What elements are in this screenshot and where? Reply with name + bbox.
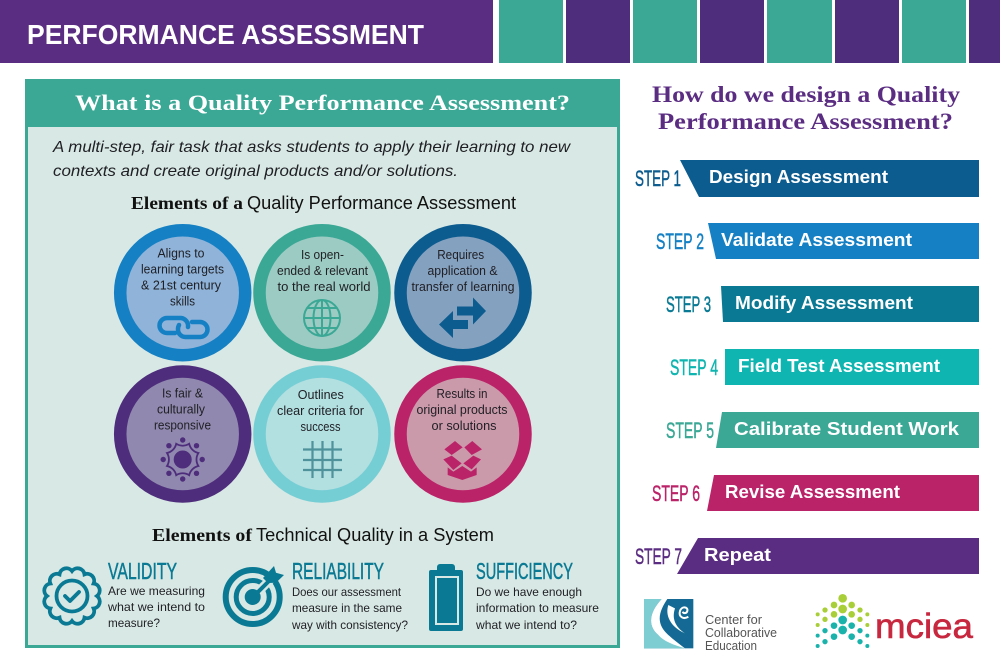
step 5	[666, 412, 979, 448]
logo: center for collaborative education: Education	[705, 638, 757, 653]
right column heading: How do we design a Quality	[652, 82, 960, 108]
circle: original products: Results in	[436, 386, 488, 401]
step 4: Field Test Assessment	[738, 355, 940, 376]
icon: community circle	[160, 437, 205, 482]
reliability text: way with consistency?	[291, 618, 408, 632]
validity text: what we intend to	[107, 600, 205, 614]
circle: application and transfer: Requires	[437, 247, 485, 262]
icon: globe	[304, 300, 340, 336]
sufficiency text: SUFFICIENCY	[476, 558, 573, 584]
circle: application and transfer: transfer of learning	[412, 279, 514, 294]
step 7: Repeat	[704, 544, 771, 565]
icon: open box	[443, 441, 482, 480]
reliability text	[291, 558, 408, 632]
circle: clear criteria: clear criteria for	[277, 403, 365, 418]
step 6	[652, 475, 979, 511]
right column heading: Performance Assessment?	[658, 109, 953, 135]
right column heading	[652, 82, 960, 135]
step 2: STEP 2	[656, 229, 704, 254]
technical quality heading: Elements of	[152, 525, 253, 545]
definition text: A multi-step, fair task that asks students to apply their learning to new	[52, 139, 572, 156]
circle: open-ended and relevant: Is open-	[301, 247, 344, 262]
sufficiency text	[475, 558, 599, 632]
title: PERFORMANCE ASSESSMENT	[27, 19, 424, 50]
circle: original products: or solutions	[432, 418, 497, 433]
circle: clear criteria: success	[300, 419, 341, 434]
step 1	[635, 160, 979, 197]
circle: aligns to learning targets: skills	[170, 293, 195, 308]
icon: validity badge	[44, 568, 100, 624]
step 3: STEP 3	[666, 292, 711, 317]
step 1: Design Assessment	[709, 166, 888, 187]
step 3: Modify Assessment	[735, 292, 913, 313]
icon: chain link	[160, 318, 208, 337]
step 4	[670, 349, 979, 385]
step 6: Revise Assessment	[725, 481, 900, 502]
circle: aligns to learning targets	[120, 230, 245, 355]
validity text: Are we measuring	[108, 584, 205, 598]
elements heading: Elements of a	[131, 193, 243, 213]
elements heading: Quality Performance Assessment	[247, 193, 516, 213]
circle: clear criteria	[260, 372, 384, 496]
circle: aligns to learning targets: learning targets	[141, 261, 224, 276]
definition text	[52, 139, 572, 180]
step 7	[635, 538, 979, 574]
circle: original products	[400, 372, 526, 496]
step 6: STEP 6	[652, 481, 700, 506]
logo: mciea: mciea	[875, 607, 974, 646]
reliability text: Does our assessment	[292, 585, 402, 599]
reliability text: RELIABILITY	[292, 558, 384, 584]
icon: sufficiency battery	[429, 564, 463, 631]
definition text: contexts and create original products and/or solutions.	[53, 163, 458, 180]
circle: original products: original products	[416, 402, 508, 417]
circle: open-ended and relevant: to the real world	[278, 279, 370, 294]
logo: center for collaborative education: Collaborative	[705, 625, 777, 640]
reliability text: measure in the same	[292, 601, 402, 615]
step 1: STEP 1	[635, 166, 681, 191]
sufficiency text: information to measure	[476, 601, 599, 615]
panel: what is a quality performance assessment	[25, 79, 620, 646]
circle: aligns to learning targets: Aligns to	[158, 246, 204, 261]
step 5: STEP 5	[666, 418, 714, 443]
sufficiency text: Do we have enough	[476, 585, 582, 599]
validity text	[107, 558, 205, 630]
step 4: STEP 4	[670, 355, 718, 380]
validity text: measure?	[108, 616, 160, 630]
logo: center for collaborative education: Center for	[705, 612, 763, 627]
technical quality heading	[152, 525, 494, 545]
icon: reliability target	[226, 566, 284, 624]
circle: application and transfer	[400, 230, 526, 355]
step 5: Calibrate Student Work	[734, 418, 960, 439]
circle: open-ended and relevant: ended & relevant	[277, 263, 368, 278]
step 2	[656, 223, 979, 259]
circle: application and transfer: application &	[428, 263, 498, 278]
icon: grid	[303, 441, 342, 478]
step 7: STEP 7	[635, 544, 682, 569]
step 2: Validate Assessment	[721, 229, 912, 250]
header banner	[0, 0, 493, 63]
circle: fair and culturally responsive: responsive	[154, 418, 211, 433]
panel heading: What is a Quality Performance Assessment?	[75, 90, 570, 115]
header colour blocks	[499, 0, 1000, 63]
logo: center for collaborative education	[644, 599, 777, 653]
circle: open-ended and relevant	[260, 230, 384, 355]
technical quality heading: Technical Quality in a System	[256, 525, 494, 545]
logo: mciea	[816, 594, 974, 648]
circle: fair and culturally responsive	[120, 372, 245, 496]
circle: clear criteria: Outlines	[298, 387, 344, 402]
circle: aligns to learning targets: & 21st century	[141, 277, 221, 292]
circle: fair and culturally responsive: culturally	[157, 402, 205, 417]
step 3	[666, 286, 979, 322]
validity text: VALIDITY	[108, 558, 177, 584]
circle: fair and culturally responsive: Is fair &	[162, 386, 203, 401]
icon: exchange arrows	[439, 298, 486, 338]
elements heading	[131, 193, 516, 213]
sufficiency text: what we intend to?	[475, 618, 577, 632]
